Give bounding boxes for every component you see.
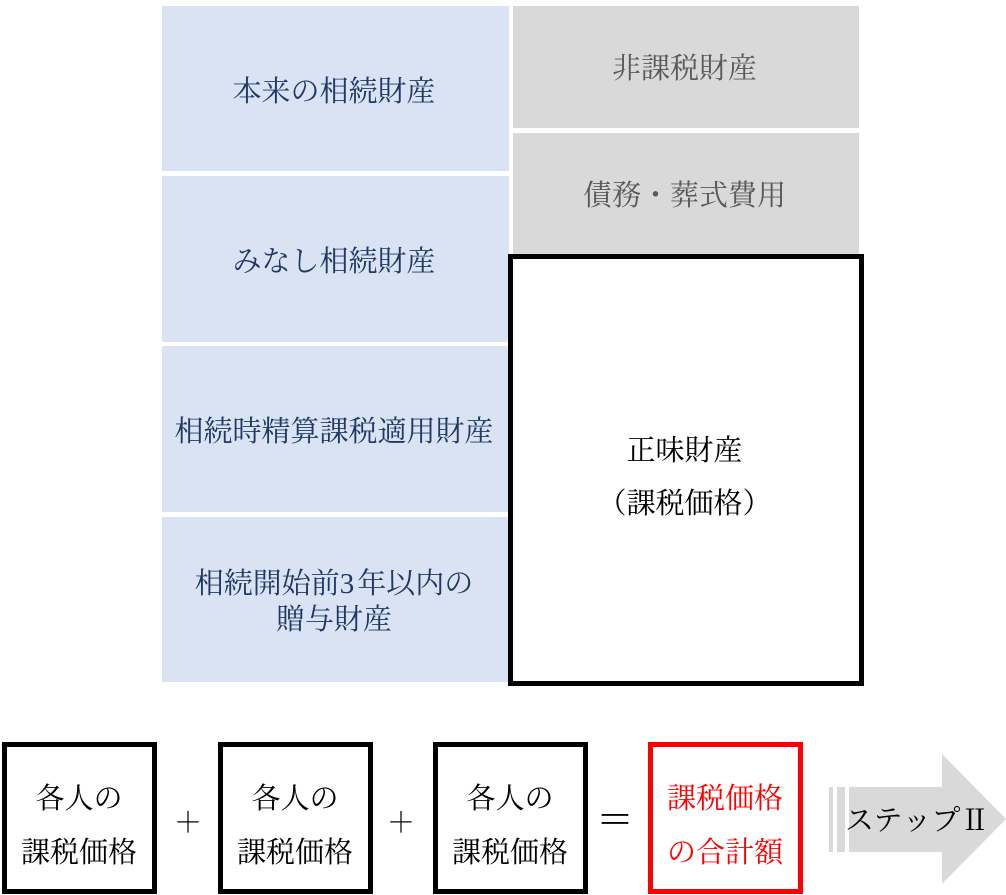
arrow: to step II: [829, 754, 1006, 884]
box: individual taxable value 3: 各人の: [466, 783, 554, 815]
panel: net assets (taxable value): [508, 254, 864, 686]
arrow label: ステップⅡ: [845, 805, 989, 837]
box: individual taxable value 2: 各人の: [251, 783, 338, 815]
panel: gifts within three years: 相続開始前3年以内の: [195, 568, 473, 600]
box: total taxable value: [648, 742, 803, 894]
panel: deemed inherited property: みなし相続財産: [232, 246, 436, 278]
box: individual taxable value 3: 課税価格: [452, 837, 568, 869]
box: individual taxable value 2: [218, 742, 373, 894]
box: total taxable value: 課税価格: [667, 783, 783, 815]
panel: debts and funeral expenses: [513, 133, 859, 255]
panel: deemed inherited property: [162, 176, 509, 342]
box: individual taxable value 1: [2, 742, 157, 894]
plus sign 1: ＋: [174, 808, 202, 839]
panel: inherent inherited property: [162, 6, 509, 171]
panel: settlement-at-inheritance property: [162, 346, 509, 512]
box: total taxable value: の合計額: [667, 837, 783, 869]
panel: settlement-at-inheritance property: 相続時精算課税適用財産: [174, 416, 494, 448]
panel: net assets (taxable value): 正味財産: [626, 435, 742, 467]
panel: gifts within three years: [162, 517, 509, 682]
box: individual taxable value 3: [433, 742, 588, 894]
panel: gifts within three years: 贈与財産: [276, 604, 392, 636]
box: individual taxable value 2: 課税価格: [237, 837, 353, 869]
panel: net assets (taxable value): （課税価格）: [597, 488, 772, 520]
panel: non-taxable property: 非課税財産: [612, 53, 757, 85]
panel: debts and funeral expenses: 債務・葬式費用: [583, 180, 786, 212]
equals sign: ＝: [596, 800, 634, 842]
plus sign 2: ＋: [387, 808, 415, 839]
panel: inherent inherited property: 本来の相続財産: [232, 76, 436, 108]
box: individual taxable value 1: 各人の: [35, 783, 122, 815]
box: individual taxable value 1: 課税価格: [21, 837, 137, 869]
panel: non-taxable property: [513, 6, 859, 128]
